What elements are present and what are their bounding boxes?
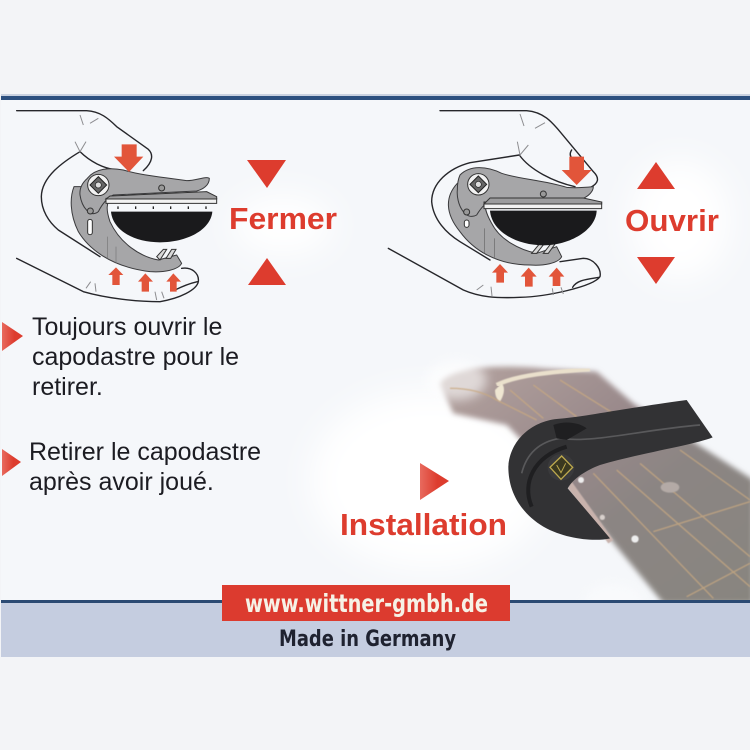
guitar neck bbox=[440, 363, 750, 600]
capo instruction infographic bbox=[1, 94, 750, 657]
instruction text 2: Retirer le capodastre bbox=[29, 438, 261, 466]
triangle up: ouvrir bbox=[637, 162, 675, 189]
instruction text 1: retirer. bbox=[32, 373, 103, 401]
label: Fermer: Fermer bbox=[229, 201, 337, 236]
bullet arrow 2 bbox=[2, 449, 21, 476]
footer band bbox=[1, 600, 750, 657]
instruction text 2: après avoir joué. bbox=[29, 468, 214, 496]
photo: capo on guitar neck bbox=[440, 363, 750, 600]
white panel bbox=[1, 99, 750, 602]
website badge bbox=[222, 585, 510, 621]
hand outline bbox=[388, 111, 600, 298]
triangle down: ouvrir bbox=[637, 257, 675, 284]
top blue rule bbox=[1, 94, 750, 100]
capo body bbox=[448, 168, 602, 265]
capo body bbox=[71, 169, 217, 272]
instruction text 1: capodastre pour le bbox=[32, 343, 239, 371]
made in germany: Made in Germany bbox=[279, 627, 456, 652]
diagram: opening the capo bbox=[388, 111, 602, 298]
pressing arrows bbox=[492, 157, 592, 287]
website badge: www.wittner-gmbh.de bbox=[245, 589, 488, 618]
bullet arrow: installation bbox=[420, 463, 449, 500]
hand outline bbox=[17, 111, 198, 302]
guitar neck cross-section bbox=[111, 208, 212, 242]
triangle down: fermer bbox=[247, 160, 286, 188]
triangle up: fermer bbox=[248, 258, 286, 285]
label: Installation: Installation bbox=[340, 507, 507, 542]
guitar neck cross-section bbox=[490, 211, 597, 245]
label: Ouvrir: Ouvrir bbox=[625, 203, 719, 238]
instruction text 1: Toujours ouvrir le bbox=[32, 313, 222, 341]
pressing arrows bbox=[108, 144, 181, 292]
diagram: closing the capo bbox=[17, 111, 217, 302]
capo bbox=[508, 400, 713, 540]
bullet arrow 1 bbox=[2, 322, 23, 351]
